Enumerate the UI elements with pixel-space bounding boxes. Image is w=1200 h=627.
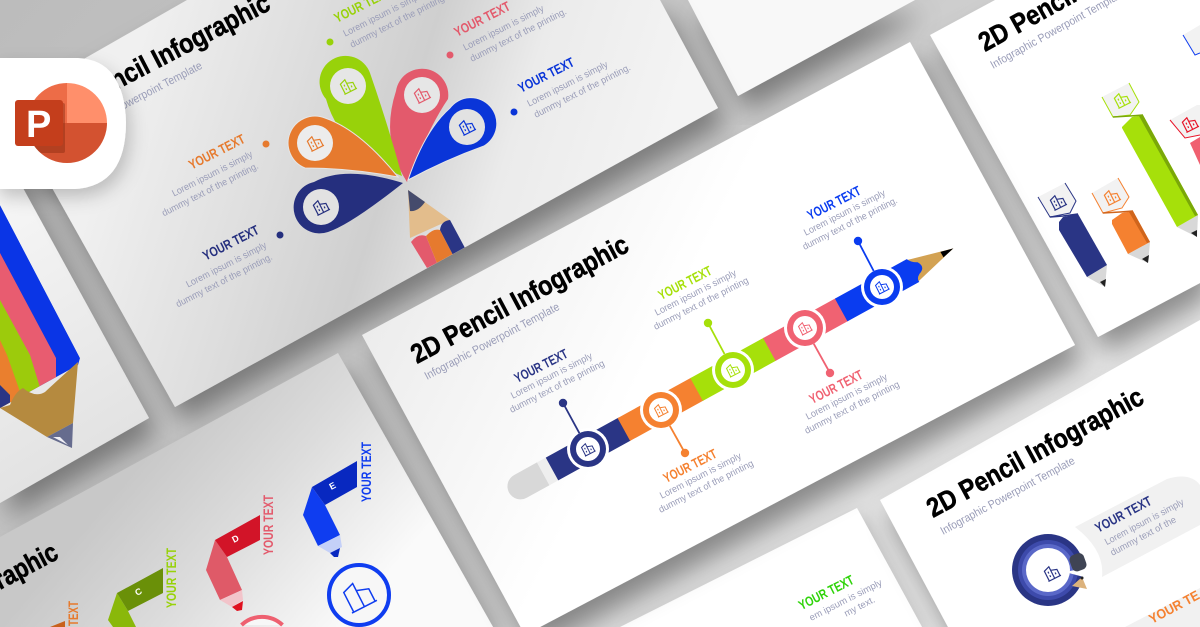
chevron pencil: red D: YOUR TEXT xyxy=(261,494,276,555)
pencil bar: navy xyxy=(1038,183,1107,287)
chevron pencil: green C: YOUR TEXT xyxy=(164,547,179,608)
label: navy: YOUR TEXT xyxy=(512,346,571,386)
dot: navy xyxy=(276,232,284,238)
dot: orange xyxy=(262,140,270,148)
label: navy: YOUR TEXT xyxy=(200,222,262,263)
pencil: top-left slide xyxy=(408,190,465,268)
pencil bar: orange xyxy=(1092,178,1150,263)
node: orange xyxy=(640,389,682,431)
node: blue xyxy=(861,266,903,308)
heading: main title: 2D Pencil Infographic xyxy=(406,229,633,369)
icon circle: red xyxy=(242,617,282,625)
label: navy: dummy text of the xyxy=(1109,515,1178,559)
node: navy xyxy=(567,428,609,470)
chevron pencil: blue E: YOUR TEXT xyxy=(359,441,374,502)
connector: orange xyxy=(670,426,689,457)
label: navy xyxy=(1092,480,1192,559)
label: navy: Lorem ipsum is simply xyxy=(1103,497,1186,548)
panel: top-right slide xyxy=(930,0,1200,337)
petal: green xyxy=(320,56,402,176)
chevron pencil: red D: D xyxy=(230,533,241,545)
label: green xyxy=(796,561,890,627)
label: navy: Lorem ipsum is simply xyxy=(509,351,595,402)
subtitle: main: Infographic Powerpoint Template xyxy=(423,301,562,383)
label: green: em ipsum is simply xyxy=(808,577,884,624)
pencil bar: red xyxy=(1170,105,1200,165)
connector: red xyxy=(814,344,834,377)
panel: top centre slide xyxy=(688,0,915,96)
label: red: YOUR TEXT xyxy=(807,367,866,407)
label: green: YOUR TEXT xyxy=(656,263,715,303)
ring pencil: navy xyxy=(1012,534,1095,606)
connector: green xyxy=(704,319,724,354)
big pencil close-up xyxy=(0,205,80,448)
petal: orange xyxy=(288,116,398,177)
label: navy: YOUR TEXT xyxy=(1092,493,1155,536)
label: navy: dummy text of the printing xyxy=(508,358,606,416)
label: orange: Lorem ipsum is simply xyxy=(170,149,255,199)
label: orange xyxy=(644,433,755,516)
panel: bottom-centre slide xyxy=(620,508,922,627)
label: navy: Lorem ipsum is simply xyxy=(184,240,269,290)
label: green: YOUR TEXT xyxy=(796,572,857,613)
chevron pencil: orange xyxy=(50,600,81,627)
node: green xyxy=(712,349,754,391)
label: red: Lorem ipsum is simply xyxy=(804,372,890,423)
chevron pencil: orange: TEXT xyxy=(66,600,81,626)
label: red xyxy=(790,354,901,437)
label: orange xyxy=(162,134,258,216)
panel: main slide xyxy=(362,42,1075,627)
panel: left pencil slide xyxy=(0,146,149,503)
label: red: Lorem ipsum is simply xyxy=(462,3,546,53)
subtitle: top-left: Infographic Powerpoint Template xyxy=(65,60,204,140)
petal: navy xyxy=(294,174,403,233)
pencil timeline xyxy=(503,237,960,504)
chevron pencil: green C xyxy=(108,547,179,627)
label: blue: YOUR TEXT xyxy=(516,54,577,96)
petal: blue xyxy=(408,98,497,180)
chevron pencil: blue E: E xyxy=(327,480,337,492)
chevron pencil: red D xyxy=(206,494,276,611)
label: blue: Lorem ipsum is simply xyxy=(802,188,888,239)
label: blue: YOUR TEXT xyxy=(805,183,864,223)
label: orange: Lorem ipsum is simply xyxy=(658,451,744,502)
panel: top-left slide xyxy=(5,0,718,407)
label: blue xyxy=(788,170,899,253)
label: blue: Lorem ipsum is simply xyxy=(526,59,610,109)
label: navy xyxy=(495,333,606,416)
label: navy xyxy=(176,224,272,307)
label: red: dummy text of the printing. xyxy=(468,6,569,65)
heading: bottom-right title: 2D Pencil Infographic xyxy=(922,381,1149,523)
subtitle: bottom-right: Infographic Powerpoint Template xyxy=(939,455,1077,538)
label: orange: YOUR TEXT xyxy=(661,446,720,486)
chevron pencil: green C: C xyxy=(133,586,144,598)
label: orange: dummy text of the printing. xyxy=(160,161,261,219)
dot: blue xyxy=(510,108,518,116)
pill: orange xyxy=(1125,588,1200,627)
panel: bottom-right slide xyxy=(880,320,1200,627)
icon: PowerPoint badge: P xyxy=(26,104,51,146)
label: orange: dummy text of the printing xyxy=(657,458,755,516)
label: blue: dummy text of the printing. xyxy=(801,195,899,253)
pencil bar: blue xyxy=(1183,25,1200,55)
label: orange: YOUR TEXT xyxy=(186,131,248,172)
label: green xyxy=(639,250,750,333)
node: red xyxy=(784,307,826,349)
icon: PowerPoint badge xyxy=(0,58,126,189)
label: red: dummy text of the printing xyxy=(803,379,901,437)
connector: blue xyxy=(854,237,874,271)
label: green: my text. xyxy=(842,594,877,619)
connector: navy xyxy=(559,399,579,433)
dot: green xyxy=(326,38,334,46)
label: blue: dummy text of the printing. xyxy=(532,62,633,121)
label: navy: dummy text of the printing. xyxy=(174,252,275,310)
pencil bar: green xyxy=(1102,83,1198,237)
chevron pencil: blue E xyxy=(303,441,374,557)
dot: red xyxy=(446,52,454,58)
pill: navy xyxy=(1075,477,1200,577)
icon circle: blue xyxy=(329,565,389,625)
petal: red xyxy=(390,69,448,182)
panel: bottom-left slide xyxy=(0,353,493,627)
label: green: dummy text of the printing xyxy=(652,275,750,333)
label: green: Lorem ipsum is simply xyxy=(653,268,739,319)
